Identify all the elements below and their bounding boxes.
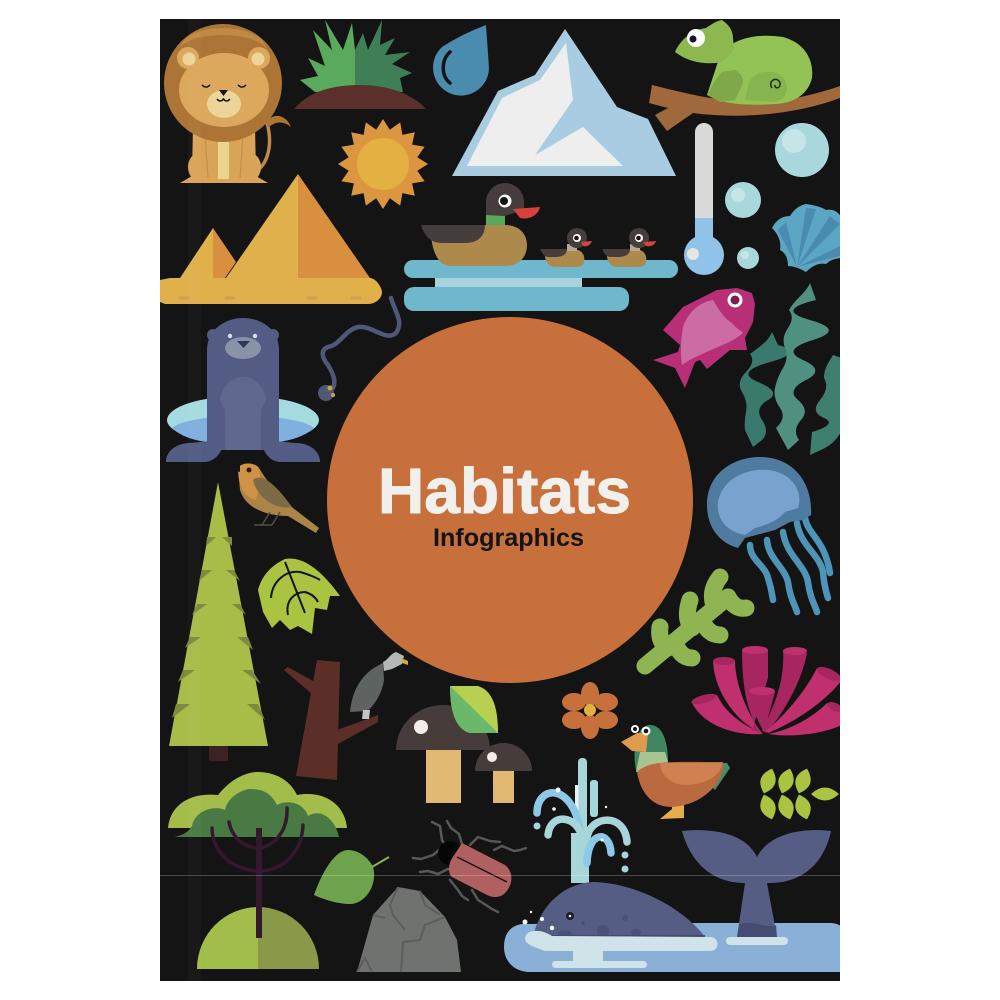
habitat title circle [327,317,693,683]
bare tree trunk [284,660,378,780]
kelp [740,283,842,455]
coral [690,646,844,735]
water [404,260,678,311]
duckling 2 [602,228,656,267]
spine shading [188,19,201,981]
adult duck [421,183,540,266]
mushrooms [396,686,532,803]
mallard duck [621,725,730,819]
rock [357,887,461,972]
spiny plant [645,577,746,666]
leaf [258,558,340,634]
iceberg [452,29,676,176]
otter in pool [166,318,320,462]
bubbles [725,123,829,269]
chameleon on branch [649,20,840,131]
sun [338,119,428,209]
acacia tree on hill [168,772,347,969]
subtitle: Infographics [433,524,584,552]
small flower [562,682,618,739]
tall conifer tree [169,482,268,761]
water drop [433,25,489,96]
title: Habitats [378,455,631,527]
book cover [160,19,840,981]
robin bird [233,464,319,533]
jellyfish [707,457,830,612]
snake [318,298,399,401]
whale tail [682,830,831,937]
shell [772,204,842,272]
grass mound [294,20,426,109]
pyramids [160,174,382,304]
vulture [350,652,408,719]
mushroom leaf [450,686,498,733]
leaf sprig [760,768,839,820]
whale fountain [534,758,628,883]
fish [653,288,755,388]
duck family on water [404,183,678,311]
beetle [413,821,526,912]
thermometer [684,123,724,275]
whale and pond [504,882,842,972]
duckling 1 [540,228,592,267]
lion [164,24,291,183]
green leaf [314,850,389,904]
